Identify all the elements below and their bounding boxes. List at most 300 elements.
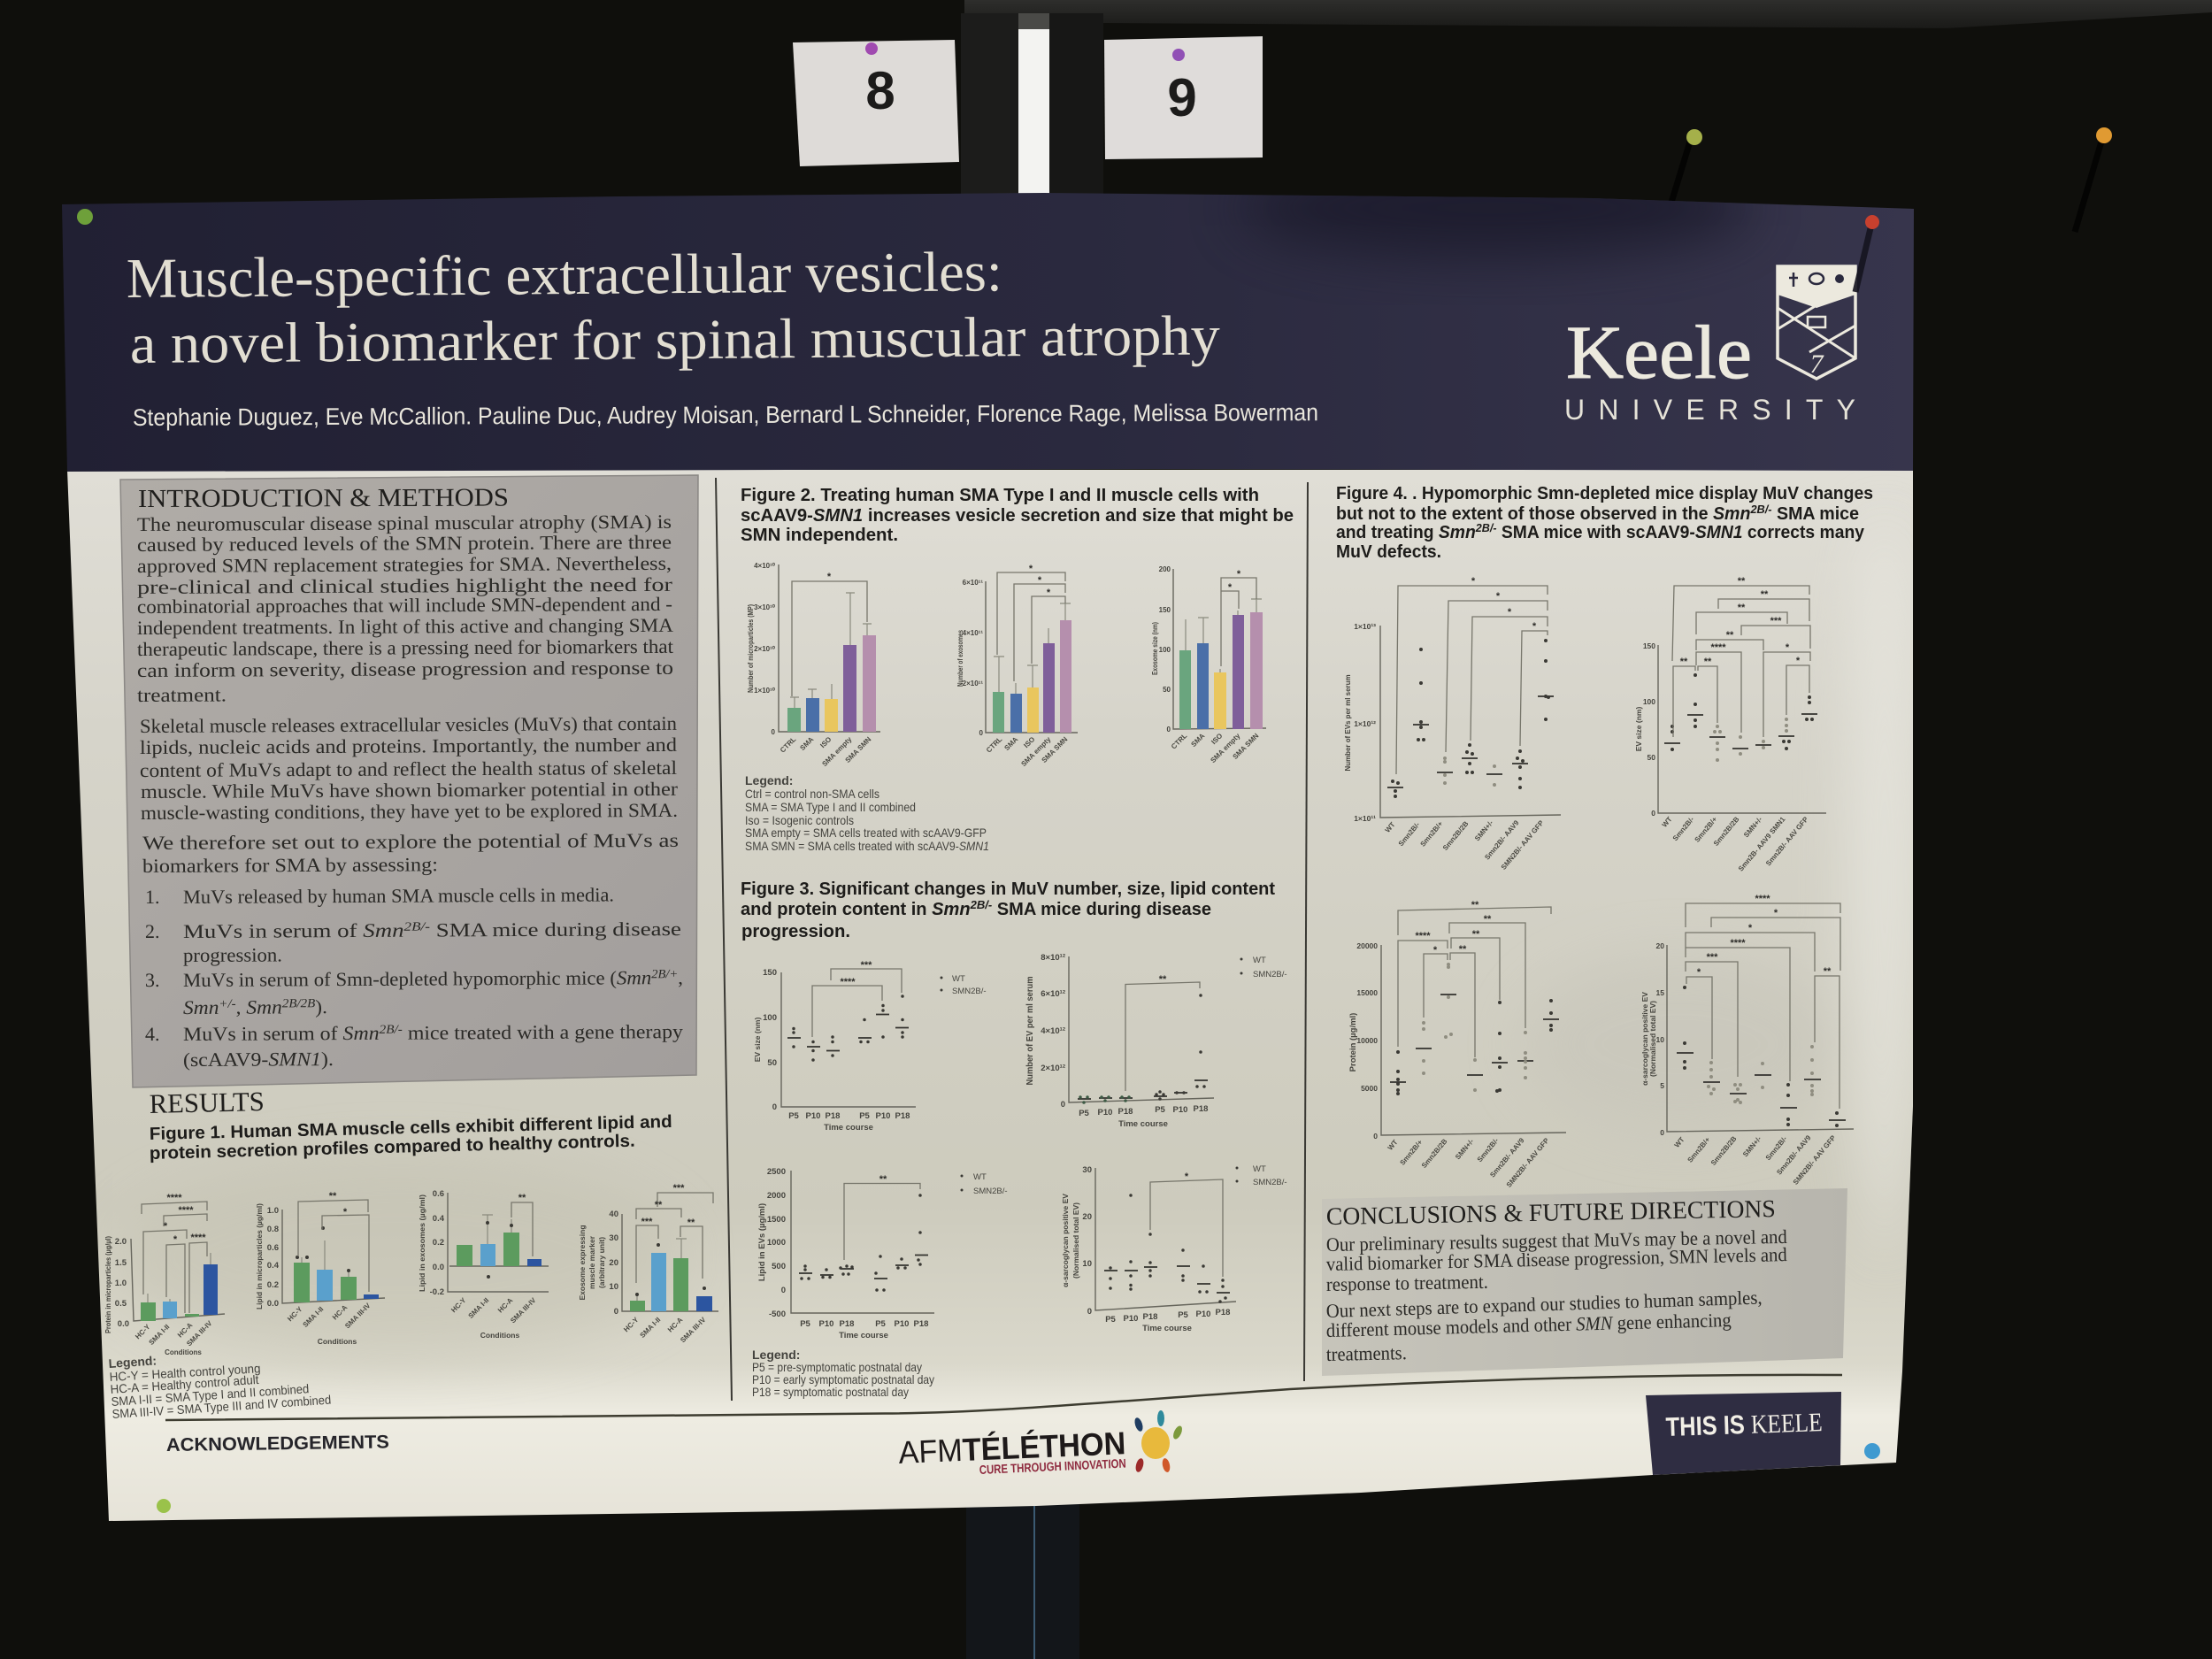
chart: figure 3c lipid in EVs: P10: [895, 1319, 909, 1329]
chart: figure 1c lipid in exosomes: SMA I-II: [467, 1296, 490, 1320]
chart: figure 4d sarcoglycan positive EV: 0: [1660, 1128, 1664, 1137]
chart: figure 3b number of EV: P18: [1118, 1107, 1133, 1117]
legend: figure 2: SMA SMN = SMA cells treated with scAAV9-SMN1: [745, 839, 989, 853]
text block: conclusions: different mouse models and other SMN gene enhancing: [1325, 1309, 1732, 1341]
text block: conclusions: [1325, 1225, 1787, 1365]
divider left column: [716, 478, 732, 1401]
panel: conclusions and future directions: [1322, 1188, 1847, 1376]
chart: figure 3a EV size: ****: [840, 977, 856, 987]
acknowledgements: ACKNOWLEDGEMENTS: [166, 1432, 389, 1455]
chart: figure 2c exosome size: Exosome size (nm): [1150, 622, 1159, 675]
chart: figure 1b lipid in microparticles: [255, 1191, 385, 1346]
text block: conclusions: response to treatment.: [1326, 1271, 1488, 1295]
text block: introduction paragraph 1: can inform on severity, disease progression and response to: [137, 657, 673, 681]
list of aims: 2B/2B: [282, 997, 316, 1010]
chart: figure 4b EV size: 100: [1643, 697, 1655, 706]
chart: figure 4c protein: **: [1472, 929, 1480, 940]
chart: figure 3d sarcoglycan positive EV: WT: [1253, 1164, 1266, 1174]
ceiling band: [964, 0, 2212, 28]
chart: figure 4a number of EVs: Smn2B/+: [1418, 819, 1445, 849]
legend: figure 1: HC-Y = Health control young: [109, 1361, 261, 1384]
chart: figure 4d sarcoglycan positive EV: ****: [1755, 894, 1770, 904]
chart: figure 1a protein in microparticles: *: [173, 1234, 178, 1245]
chart: figure 3b number of EV: **: [1159, 974, 1167, 985]
chart: figure 1d exosome muscle marker: ***: [641, 1217, 653, 1227]
heading: figure 4: but not to the extent of those observed in the Smn: [1336, 504, 1751, 524]
chart: figure 4b EV size: Smn2B- AAV9 SMN1: [1737, 815, 1787, 873]
chart: figure 4c protein: SMN+/-: [1454, 1137, 1476, 1161]
legend: figure 3: P10 = early symptomatic postnatal day: [752, 1372, 934, 1386]
list of aims: 2B/+: [651, 968, 678, 981]
chart: figure 3a EV size: EV size (nm): [753, 1018, 762, 1062]
chart: figure 4d sarcoglycan positive EV: [1640, 894, 1854, 1187]
chart: figure 4a number of EVs: Number of EVs per ml serum: [1343, 674, 1352, 772]
heading: figure 1: protein secretion profiles compared to healthy controls.: [150, 1132, 635, 1164]
chart: figure 3a EV size: P10: [876, 1111, 890, 1121]
chart: figure 1a protein in microparticles: Conditions: [165, 1348, 202, 1356]
chart: figure 3d sarcoglycan positive EV: 30: [1082, 1165, 1092, 1175]
list of aims: mice treated with a gene therapy: [403, 1020, 683, 1044]
heading: figure 3: 2B/-: [970, 898, 992, 911]
chart: figure 4a number of EVs: SMN+/-: [1473, 818, 1495, 842]
chart: figure 3c lipid in EVs: Lipid in EVs (µg/ml): [757, 1203, 767, 1281]
chart: figure 4b EV size: **: [1761, 589, 1769, 600]
chart: figure 3d sarcoglycan positive EV: α-sarcoglycan positive EV: [1061, 1194, 1070, 1287]
lower stand post: [966, 1504, 1079, 1659]
AFM Telethon logo: AFMTÉLÉTHON: [898, 1425, 1126, 1471]
chart: figure 1d exosome muscle marker: ***: [673, 1183, 685, 1194]
chart: figure 1b lipid in microparticles: 0.4: [267, 1261, 280, 1271]
text block: introduction paragraph 1: independent treatments. In light of this active and changing SMA: [137, 614, 673, 639]
text block: conclusions: Our next steps are to expand our studies to human samples,: [1325, 1286, 1763, 1322]
chart: figure 4b EV size: Smn2B/2B: [1712, 815, 1741, 848]
chart: figure 3d sarcoglycan positive EV: 20: [1082, 1212, 1092, 1222]
chart: figure 3d sarcoglycan positive EV: P18: [1143, 1312, 1157, 1322]
pins on board: [865, 42, 2112, 232]
chart: figure 3c lipid in EVs: 500: [772, 1262, 786, 1271]
chart: figure 1d exosome muscle marker: **: [687, 1217, 695, 1228]
chart: figure 3a EV size: P5: [788, 1111, 800, 1121]
chart: figure 3a EV size: ***: [861, 960, 872, 971]
legend: figure 3: P5 = pre-symptomatic postnatal day: [752, 1360, 922, 1374]
chart: figure 4d sarcoglycan positive EV: **: [1824, 966, 1832, 977]
heading: figure 4: [1336, 484, 1873, 562]
heading: figure 4: 2B/-: [1749, 503, 1772, 516]
chart: figure 3d sarcoglycan positive EV: P5: [1105, 1315, 1117, 1325]
legend: figure 2: Ctrl = control non-SMA cells: [745, 787, 879, 801]
legend: figure 1: SMA I-II = SMA Type I and II combined: [111, 1381, 310, 1409]
chart: figure 1d exosome muscle marker: 30: [609, 1233, 618, 1243]
header shadow: [1253, 195, 1747, 267]
chart: figure 1d exosome muscle marker: SMA III-IV: [679, 1316, 708, 1344]
chart: figure 4c protein: 20000: [1356, 941, 1378, 950]
chart: figure 4c protein: Smn2B/- AAV9: [1488, 1136, 1526, 1179]
chart: figure 3d sarcoglycan positive EV: 0: [1087, 1307, 1092, 1317]
chart: figure 2a number of microparticles: Number of microparticles (MP): [746, 604, 755, 693]
chart: figure 1d exosome muscle marker: Exosome expressing: [578, 1225, 587, 1301]
chart: figure 4a number of EVs: Smn2B/- AAV9: [1483, 818, 1521, 862]
chart: figure 3b number of EV: P5: [1079, 1109, 1090, 1118]
chart: figure 4b EV size: **: [1704, 657, 1712, 667]
text block: introduction paragraph 1: caused by reduced levels of the SMN protein. There are three: [137, 531, 672, 556]
chart: figure 4a number of EVs: Smn2B/2B: [1441, 819, 1471, 852]
chart: figure 1b lipid in microparticles: 0.2: [267, 1280, 279, 1290]
chart: figure 3c lipid in EVs: P10: [819, 1319, 833, 1329]
chart: figure 4b EV size: Smn2B/- AAV GFP: [1764, 815, 1810, 867]
chart: figure 4d sarcoglycan positive EV: *: [1774, 908, 1778, 918]
list of aims: progression.: [183, 943, 282, 966]
chart: figure 3b number of EV: P18: [1194, 1104, 1208, 1114]
chart: figure 4a number of EVs: *: [1471, 576, 1476, 587]
chart: figure 3a EV size: SMN2B/-: [952, 987, 987, 996]
legend: figure 3: Legend:: [752, 1348, 800, 1362]
chart: figure 2c exosome size: 150: [1159, 606, 1171, 614]
chart: figure 4b EV size: **: [1738, 603, 1746, 613]
chart: figure 2c exosome size: 0: [1167, 726, 1171, 733]
chart: figure 1d exosome muscle marker: muscle marker: [588, 1235, 596, 1289]
chart: figure 1c lipid in exosomes: HC-Y: [449, 1296, 468, 1314]
Keele University logo: Keele: [1566, 310, 1752, 395]
chart: figure 4d sarcoglycan positive EV: *: [1697, 967, 1701, 978]
chart: figure 4d sarcoglycan positive EV: ****: [1730, 938, 1746, 949]
AFM Telethon logo: [898, 1410, 1184, 1477]
panel: introduction and methods: [120, 475, 698, 1087]
text block: conclusions: valid biomarker for SMA disease progression, SMN levels and: [1326, 1243, 1787, 1275]
chart: figure 2a number of microparticles: SMA SMN: [844, 735, 873, 764]
text block: introduction paragraph 2: muscle-wasting conditions, they have yet to be explored in SMA.: [141, 799, 678, 824]
chart: figure 4c protein: [1348, 900, 1566, 1189]
chart: figure 4d sarcoglycan positive EV: *: [1748, 923, 1753, 933]
text block: introduction paragraph 1: therapeutic landscape, there is a pressing need for biomarkers that: [137, 635, 673, 660]
chart: figure 4b EV size: WT: [1661, 815, 1674, 829]
chart: figure 3c lipid in EVs: P18: [914, 1319, 928, 1329]
heading: figure 4: SMN1 corrects many: [1695, 523, 1869, 542]
chart: figure 3b number of EV: Number of EV per ml serum: [1025, 976, 1035, 1085]
chart: figure 3b number of EV: Time course: [1118, 1119, 1168, 1129]
chart: figure 1c lipid in exosomes: 0.0: [433, 1263, 444, 1272]
chart: figure 1a protein in microparticles: SMA I-II: [148, 1323, 171, 1347]
chart: figure 3c lipid in EVs: 0: [781, 1286, 786, 1295]
text block: aims: We therefore set out to explore the potential of MuVs as: [142, 829, 679, 854]
chart: figure 3d sarcoglycan positive EV: P5: [1178, 1310, 1189, 1320]
chart: figure 1d exosome muscle marker: 20: [609, 1258, 618, 1268]
chart: figure 2b number of exosomes: [956, 564, 1078, 768]
chart: figure 1c lipid in exosomes: HC-A: [496, 1296, 515, 1315]
chart: figure 4a number of EVs: *: [1508, 607, 1512, 618]
Keele University logo: UNIVERSITY: [1564, 394, 1855, 426]
chart: figure 4b EV size: 150: [1643, 641, 1655, 650]
chart: figure 1b lipid in microparticles: Lipid in microparticles (µg/ml): [255, 1203, 264, 1310]
chart: figure 3b number of EV: [1025, 953, 1287, 1129]
legend: figure 1: Legend:: [108, 1353, 157, 1371]
chart: figure 4c protein: Smn2B/-: [1476, 1136, 1501, 1164]
chart: figure 1b lipid in microparticles: 0.6: [267, 1243, 279, 1253]
chart: figure 1d exosome muscle marker: SMA I-II: [639, 1316, 662, 1340]
heading: introduction and methods: INTRODUCTION & METHODS: [138, 484, 509, 513]
paper body: [67, 470, 1913, 1521]
chart: figure 1d exosome muscle marker: HC-Y: [622, 1316, 641, 1333]
chart: figure 1d exosome muscle marker: (arbitrary unit): [597, 1237, 606, 1288]
legend: figure 2: Legend:: [745, 773, 793, 787]
chart: figure 2b number of exosomes: SMA empty: [1019, 735, 1053, 768]
chart: figure 4b EV size: [1634, 576, 1826, 873]
chart: figure 4a number of EVs: [1343, 576, 1561, 872]
list of aims: MuVs in serum of Smn-depleted hypomorphic mice ( Smn: [183, 966, 650, 991]
chart: figure 3a EV size: P10: [806, 1111, 820, 1121]
list of aims: SMA mice during disease: [430, 918, 681, 941]
chart: figure 3d sarcoglycan positive EV: SMN2B/-: [1253, 1178, 1287, 1187]
chart: figure 1a protein in microparticles: HC-Y: [134, 1323, 152, 1340]
chart: figure 3b number of EV: SMN2B/-: [1253, 970, 1287, 979]
chart: figure 4c protein: ****: [1415, 931, 1431, 941]
number card 8: [793, 40, 959, 166]
heading: figure 2: SMN independent.: [741, 526, 898, 545]
chart: figure 4c protein: 0: [1373, 1132, 1378, 1141]
text block: aims: biomarkers for SMA by assessing:: [142, 853, 438, 877]
chart: figure 3a EV size: [753, 960, 987, 1133]
chart: figure 4c protein: 5000: [1361, 1084, 1378, 1093]
chart: figure 3a EV size: P18: [895, 1111, 910, 1121]
chart: figure 4d sarcoglycan positive EV: 15: [1656, 988, 1664, 997]
chart: figure 4c protein: Smn2B/+: [1398, 1138, 1425, 1167]
chart: figure 4c protein: **: [1459, 944, 1467, 955]
chart: figure 1a protein in microparticles: 0.5: [115, 1299, 127, 1309]
chart: figure 2a number of microparticles: 1×10¹⁰: [754, 687, 776, 695]
list of aims: 1.: [145, 886, 160, 908]
text block: introduction paragraph 2: muscle. While MuVs have shown biomarker potential in other: [141, 778, 679, 803]
heading: figure 2: scAAV9-SMN1 increases vesicle secretion and size that might be: [741, 506, 1294, 526]
poster title: a novel biomarker for spinal muscular atrophy: [130, 303, 1220, 375]
chart: figure 3d sarcoglycan positive EV: (Normalised total EV): [1071, 1202, 1080, 1279]
heading: figure 3: and protein content in Smn: [741, 900, 970, 919]
list of aims: 4.: [145, 1023, 160, 1045]
legend: figure 1: [108, 1353, 332, 1421]
chart: figure 4a number of EVs: 1×10¹³: [1354, 622, 1376, 631]
chart: figure 3c lipid in EVs: 2000: [767, 1191, 786, 1201]
text block: introduction paragraph 1: [137, 511, 673, 706]
chart: figure 1a protein in microparticles: [104, 1193, 225, 1356]
chart: figure 4d sarcoglycan positive EV: WT: [1673, 1135, 1686, 1149]
heading: figure 3: SMA mice during disease: [992, 900, 1211, 919]
chart: figure 3c lipid in EVs: **: [879, 1174, 887, 1185]
list of aims: ,: [678, 966, 683, 988]
text block: introduction paragraph 2: [140, 712, 679, 824]
pins on footer: [157, 1443, 1880, 1513]
chart: figure 1a protein in microparticles: *: [164, 1221, 168, 1232]
chart: figure 2a number of microparticles: SMA empty: [820, 735, 854, 768]
chart: figure 1c lipid in exosomes: Lipid in exosomes (µg/ml): [418, 1194, 426, 1292]
authors: Stephanie Duguez, Eve McCallion. Pauline Duc, Audrey Moisan, Bernard L Schneider, Florence Rage, Melissa Bowerman: [133, 399, 1318, 431]
footer rule: [165, 1375, 1842, 1420]
chart: figure 2c exosome size: SMA SMN: [1232, 732, 1261, 761]
chart: figure 1d exosome muscle marker: HC-A: [666, 1316, 685, 1334]
chart: figure 3a EV size: 50: [767, 1058, 777, 1068]
chart: figure 4d sarcoglycan positive EV: SMN2B/- AAV GFP: [1792, 1133, 1838, 1187]
legend: figure 1: HC-A = Healthy control adult: [110, 1372, 259, 1396]
chart: figure 2b number of exosomes: 2×10¹¹: [963, 680, 983, 687]
chart: figure 3b number of EV: 4×10¹²: [1041, 1026, 1065, 1036]
chart: figure 3c lipid in EVs: 1500: [767, 1215, 786, 1225]
chart: figure 4a number of EVs: *: [1496, 591, 1501, 602]
list of aims: 2B/-: [403, 921, 430, 934]
chart: figure 3c lipid in EVs: P5: [875, 1319, 887, 1329]
chart: figure 2b number of exosomes: SMA SMN: [1041, 735, 1070, 764]
chart: figure 4c protein: 15000: [1356, 988, 1378, 997]
chart: figure 4d sarcoglycan positive EV: ***: [1707, 952, 1718, 963]
chart: figure 3b number of EV: P10: [1098, 1108, 1112, 1118]
list of aims: (scAAV9- SMN1).: [183, 1048, 334, 1071]
chart: figure 3d sarcoglycan positive EV: 10: [1082, 1259, 1092, 1269]
chart: figure 1c lipid in exosomes: 0.6: [433, 1189, 444, 1199]
chart: figure 3d sarcoglycan positive EV: [1061, 1164, 1287, 1333]
Keele University logo: [1564, 266, 1855, 426]
chart: figure 3b number of EV: P5: [1155, 1105, 1166, 1115]
chart: figure 1c lipid in exosomes: SMA III-IV: [509, 1296, 538, 1325]
chart: figure 4c protein: **: [1484, 914, 1492, 925]
chart: figure 4a number of EVs: SMN2B/- AAV GFP: [1500, 818, 1546, 872]
chart: figure 3c lipid in EVs: Time course: [839, 1331, 888, 1340]
chart: figure 2c exosome size: [1150, 565, 1266, 764]
chart: figure 2a number of microparticles: ISO: [818, 735, 833, 749]
chart: figure 4c protein: Smn2B/2B: [1420, 1137, 1449, 1170]
legend: figure 3: P18 = symptomatic postnatal day: [752, 1385, 909, 1399]
chart: figure 2a number of microparticles: CTRL: [779, 735, 797, 754]
chart: figure 1d exosome muscle marker: 40: [609, 1210, 618, 1219]
poster title: [127, 240, 1220, 375]
chart: figure 4b EV size: Smn2B/+: [1693, 815, 1719, 844]
heading: figure 3: progression.: [741, 922, 850, 941]
chart: figure 1b lipid in microparticles: 0.0: [267, 1299, 279, 1309]
chart: figure 3d sarcoglycan positive EV: P18: [1216, 1308, 1230, 1317]
AFM Telethon logo: CURE THROUGH INNOVATION: [979, 1455, 1126, 1477]
chart: figure 1a protein in microparticles: ****: [178, 1205, 194, 1216]
chart: figure 1a protein in microparticles: 0.0: [118, 1319, 129, 1329]
chart: figure 1a protein in microparticles: HC-A: [176, 1321, 195, 1340]
chart: figure 1a protein in microparticles: ****: [190, 1233, 206, 1243]
chart: figure 2b number of exosomes: SMA: [1002, 735, 1020, 752]
list of aims: MuVs in serum of Smn: [183, 919, 396, 942]
chart: figure 2a number of microparticles: *: [827, 572, 832, 582]
chart: figure 3c lipid in EVs: SMN2B/-: [973, 1187, 1008, 1196]
legend: figure 2: Iso = Isogenic controls: [745, 813, 854, 827]
chart: figure 4d sarcoglycan positive EV: SMN+/-: [1741, 1134, 1763, 1158]
chart: figure 4d sarcoglycan positive EV: 20: [1656, 941, 1664, 950]
chart: figure 4c protein: *: [1433, 945, 1438, 956]
chart: figure 2b number of exosomes: ISO: [1022, 735, 1036, 749]
chart: figure 2b number of exosomes: *: [1029, 564, 1033, 574]
list of aims: +/-: [219, 998, 236, 1011]
heading: figure 1: [150, 1112, 672, 1164]
chart: figure 1d exosome muscle marker: [578, 1183, 718, 1344]
text block: introduction paragraph 1: The neuromuscular disease spinal muscular atrophy (SMA) is: [137, 511, 672, 535]
chart: figure 2c exosome size: *: [1228, 582, 1233, 593]
chart: figure 2b number of exosomes: Number of exosomes: [956, 630, 964, 687]
list of aims: Smn: [183, 996, 236, 1018]
legend: figure 2: [745, 773, 989, 853]
chart: figure 4a number of EVs: 1×10¹¹: [1354, 814, 1376, 823]
chart: figure 1b lipid in microparticles: HC-Y: [286, 1305, 304, 1323]
chart: figure 1c lipid in exosomes: Conditions: [480, 1331, 519, 1340]
chart: figure 3b number of EV: 8×10¹²: [1041, 953, 1065, 963]
chart: figure 4a number of EVs: 1×10¹²: [1354, 719, 1376, 728]
chart: figure 2a number of microparticles: 2×10¹⁰: [754, 645, 776, 653]
chart: figure 3c lipid in EVs: -500: [769, 1310, 786, 1319]
chart: figure 4d sarcoglycan positive EV: Smn2B/-: [1764, 1134, 1789, 1162]
chart: figure 4b EV size: EV size (nm): [1634, 707, 1643, 751]
chart: figure 3b number of EV: P10: [1173, 1105, 1187, 1115]
chart: figure 4c protein: **: [1471, 900, 1479, 910]
chart: figure 4d sarcoglycan positive EV: α-sarcoglycan positive EV: [1640, 992, 1649, 1086]
chart: figure 1c lipid in exosomes: 0.2: [433, 1238, 444, 1248]
text block: conclusions: treatments.: [1326, 1341, 1407, 1365]
chart: figure 3a EV size: P5: [859, 1111, 871, 1121]
chart: figure 3c lipid in EVs: 1000: [767, 1238, 786, 1248]
list of aims: 3.: [145, 969, 160, 991]
heading: conclusions: CONCLUSIONS & FUTURE DIRECTIONS: [1326, 1195, 1776, 1231]
number card 8: 8: [865, 61, 895, 120]
heading: figure 3: [741, 879, 1275, 941]
heading: results: RESULTS: [149, 1086, 265, 1119]
chart: figure 4c protein: Protein (µg/ml): [1348, 1013, 1358, 1071]
text block: conclusions: Our preliminary results suggest that MuVs may be a novel and: [1326, 1225, 1787, 1256]
chart: figure 2c exosome size: 100: [1159, 646, 1171, 654]
chart: figure 3a EV size: WT: [952, 974, 965, 984]
chart: figure 4d sarcoglycan positive EV: Smn2B/+: [1686, 1135, 1712, 1164]
chart: figure 1a protein in microparticles: 1.5: [115, 1258, 127, 1268]
chart: figure 3c lipid in EVs: 2500: [767, 1167, 786, 1177]
chart: figure 4d sarcoglycan positive EV: 10: [1656, 1035, 1664, 1044]
heading: figure 4: MuV defects.: [1336, 542, 1441, 562]
list of aims: ,: [236, 996, 246, 1018]
chart: figure 2c exosome size: SMA: [1189, 732, 1207, 749]
chart: figure 3d sarcoglycan positive EV: P10: [1196, 1310, 1210, 1319]
text block: introduction paragraph 1: approved SMN replacement strategies for SMA. Nevertheless,: [137, 552, 672, 577]
list of aims: 2.: [145, 920, 160, 942]
chart: figure 4b EV size: SMN+/-: [1742, 815, 1764, 839]
number card 9: [1104, 36, 1263, 159]
chart: figure 3b number of EV: 6×10¹²: [1041, 989, 1065, 999]
chart: figure 4a number of EVs: WT: [1384, 820, 1397, 834]
chart: figure 4b EV size: **: [1680, 657, 1688, 667]
chart: figure 4d sarcoglycan positive EV: 5: [1660, 1081, 1664, 1090]
text block: introduction paragraph 2: content of MuVs adapt to and reflect the health status of skeletal: [140, 757, 677, 781]
heading: figure 4: SMA mice: [1772, 504, 1859, 524]
chart: figure 4b EV size: **: [1726, 630, 1734, 641]
header band: [62, 193, 1914, 472]
text block: introduction paragraph 2: lipids, nucleic acids and proteins. Importantly, the number and: [140, 733, 677, 758]
chart: figure 1b lipid in microparticles: **: [329, 1191, 337, 1202]
chart: figure 2c exosome size: *: [1237, 569, 1241, 580]
chart: figure 3a EV size: Time course: [824, 1123, 873, 1133]
list of aims: Smn: [246, 995, 316, 1018]
chart: figure 1b lipid in microparticles: *: [343, 1207, 348, 1217]
chart: figure 4c protein: SMN2B/- AAV GFP: [1505, 1136, 1551, 1189]
chart: figure 4a number of EVs: Smn2B/-: [1397, 820, 1422, 848]
list of aims: MuVs released by human SMA muscle cells in media.: [183, 883, 614, 908]
chart: figure 1b lipid in microparticles: HC-A: [331, 1303, 349, 1322]
chart: figure 3a EV size: 0: [772, 1102, 777, 1112]
list of aims: ).: [315, 995, 327, 1018]
chart: figure 1b lipid in microparticles: SMA I-II: [302, 1305, 325, 1329]
text block: introduction paragraph 1: pre-clinical and clinical studies highlight the need for: [137, 573, 673, 598]
chart: figure 4b EV size: **: [1738, 576, 1746, 587]
chart: figure 1d exosome muscle marker: **: [655, 1200, 663, 1210]
chart: figure 3c lipid in EVs: [757, 1167, 1008, 1340]
soft lighting on paper: [157, 590, 1913, 1347]
chart: figure 3b number of EV: 2×10¹²: [1041, 1064, 1065, 1073]
text block: introduction paragraph 1: combinatorial approaches that will include SMN-dependent and -: [137, 593, 672, 618]
chart: figure 2a number of microparticles: SMA: [798, 735, 816, 752]
